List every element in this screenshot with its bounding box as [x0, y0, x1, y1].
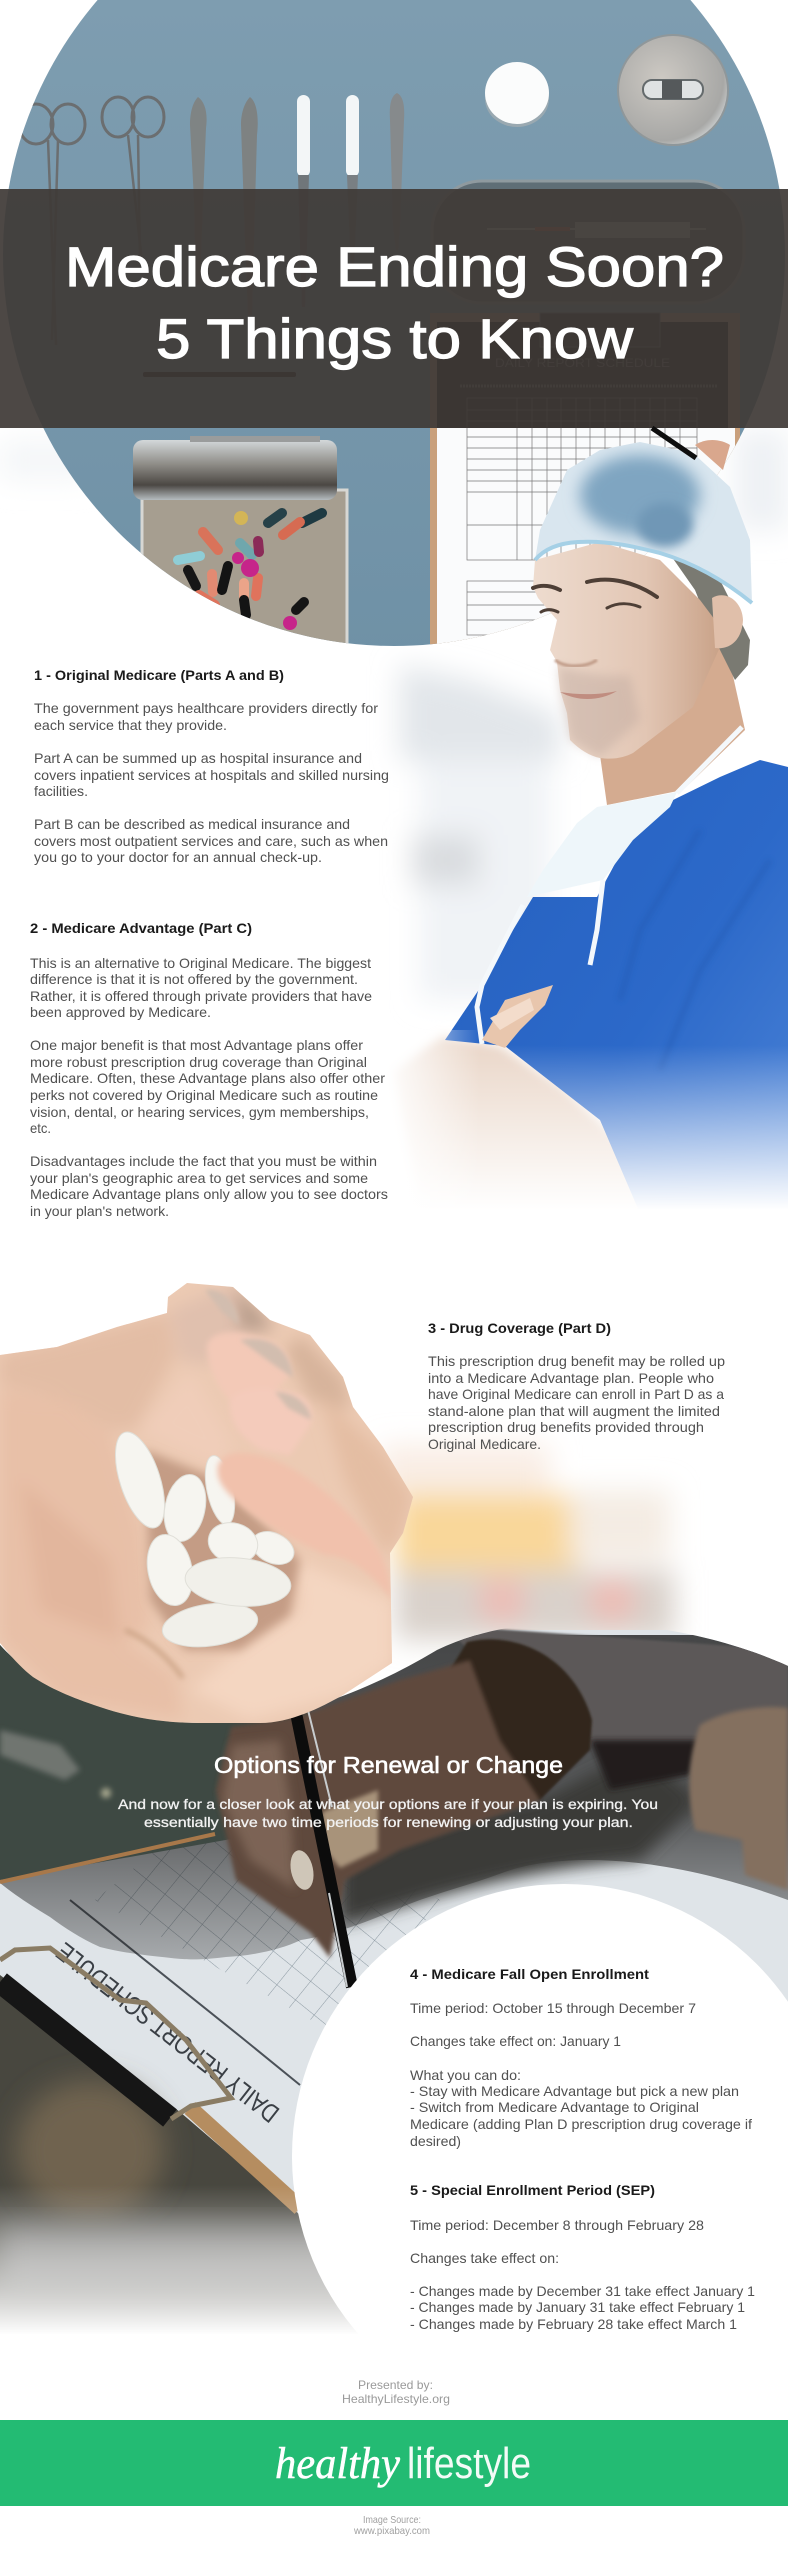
schedule label: DAILY REPORT SCHEDULE	[50, 1937, 285, 2129]
right hand	[690, 1707, 788, 1890]
text block: section 2: more robust prescription drug coverage than Original	[30, 1055, 367, 1070]
fingernail	[290, 1850, 314, 1890]
text block: section 4: 4 - Medicare Fall Open Enrollment	[410, 1966, 649, 1982]
text block: section 3	[428, 1320, 725, 1452]
text block: section 2: 2 - Medicare Advantage (Part C)	[30, 920, 252, 936]
icon: scissors 2	[100, 96, 166, 189]
text block: section 1: Part A can be summed up as hospital insurance and	[34, 751, 362, 766]
text block: section 2: been approved by Medicare.	[30, 1005, 211, 1020]
pen and fingertip	[652, 428, 730, 470]
dark desk	[0, 1630, 310, 1880]
text block: section 2: your plan's geographic area to get services and some	[30, 1171, 368, 1186]
metal clip	[0, 1948, 231, 2119]
text block: section 3: 3 - Drug Coverage (Part D)	[428, 1320, 611, 1336]
text block: section 2: Medicare. Often, these Advantage plans also offer other	[30, 1071, 385, 1086]
photo fade to white	[0, 2100, 788, 2384]
text block: section 1	[34, 667, 389, 865]
text block: section 2: This is an alternative to Original Medicare. The biggest	[30, 956, 371, 971]
hand highlights	[222, 1740, 295, 1890]
heading: options for renewal or change: Options for Renewal or Change	[214, 1752, 563, 1778]
logo: healthy	[275, 2439, 400, 2488]
clipboard with schedule: DAILY REPORT SCHEDULE	[495, 356, 670, 370]
text block: section 2: Disadvantages include the fact that you must be within	[30, 1154, 377, 1169]
desk objects	[0, 1730, 111, 1798]
icon: steel dish	[618, 35, 728, 145]
text block: section 2: etc.	[30, 1121, 51, 1136]
dark wave overlay	[0, 1635, 788, 1959]
logo	[275, 2439, 531, 2488]
cavity shadow	[145, 1450, 300, 1650]
neck	[600, 640, 745, 805]
eyebrows and eyes	[533, 580, 657, 612]
text block: section 5: Changes take effect on:	[410, 2251, 559, 2266]
scrub folds	[620, 830, 770, 1070]
text block: section 3: This prescription drug benefit may be rolled up	[428, 1354, 725, 1369]
icon: tweezers	[390, 93, 404, 189]
logo: lifestyle	[407, 2439, 531, 2488]
text block: section 2: vision, dental, or hearing services, gym memberships,	[30, 1105, 369, 1120]
shadow under sleeve	[590, 1740, 700, 1790]
presented by credit: HealthyLifestyle.org	[342, 2392, 450, 2406]
cuff	[450, 1639, 592, 1800]
text block: section 5: - Changes made by December 31 take effect January 1	[410, 2284, 755, 2299]
straps	[477, 727, 742, 1044]
text block: section 4: What you can do:	[410, 2068, 521, 2083]
blurred hospital backdrop	[0, 430, 788, 1000]
text block: section 1: you go to your doctor for an annual check-up.	[34, 850, 322, 865]
icon: steel tin of capsules	[133, 436, 347, 650]
mouth	[560, 691, 617, 699]
presented by credit: Presented by:	[358, 2378, 433, 2392]
surgical cap	[535, 442, 752, 603]
dark photo: hands over schedule	[0, 1625, 788, 2380]
text block: section 4: Time period: October 15 through December 7	[410, 2001, 696, 2016]
icon: scalpel 2	[241, 97, 258, 189]
text block: section 5: 5 - Special Enrollment Period (SEP)	[410, 2182, 655, 2198]
hand holding pills	[0, 1280, 420, 1730]
text block: section 3: stand-alone plan that will augment the limited	[428, 1404, 720, 1419]
text block: section 2: perks not covered by Original Medicare such as routine	[30, 1088, 378, 1103]
wood edge	[0, 1834, 215, 1882]
text block: options intro: essentially have two time periods for renewing or adjusting your plan.	[144, 1814, 633, 1830]
white circle panel	[292, 1884, 788, 2428]
printed line	[70, 1900, 300, 2085]
text block: section 5: - Changes made by January 31 take effect February 1	[410, 2300, 745, 2315]
icon: scalpel 1	[190, 97, 207, 189]
text block: section 5	[410, 2182, 755, 2332]
text block: options intro	[118, 1796, 658, 1830]
wood edge bottom	[190, 2108, 300, 2208]
title: Medicare Ending Soon?	[65, 235, 724, 298]
text block: section 1: facilities.	[34, 784, 88, 799]
text block: section 4: Changes take effect on: January 1	[410, 2034, 621, 2049]
icon: white handle forceps 1	[297, 95, 310, 189]
text block: section 5: - Changes made by February 28 take effect March 1	[410, 2317, 737, 2332]
text block: section 1: 1 - Original Medicare (Parts A and B)	[34, 667, 284, 683]
text block: section 2: Medicare Advantage plans only allow you to see doctors	[30, 1187, 388, 1202]
doctor figure	[392, 428, 788, 1260]
text block: section 2: difference is that it is not offered by the government.	[30, 972, 358, 987]
hair	[667, 550, 750, 680]
image source credit: www.pixabay.com	[353, 2525, 430, 2537]
text block: section 3: Original Medicare.	[428, 1437, 541, 1452]
icon: scissors 1	[21, 102, 86, 189]
cap shading	[580, 455, 700, 547]
title: 5 Things to Know	[156, 307, 634, 370]
text block: section 1: Part B can be described as medical insurance and	[34, 817, 350, 832]
presented by credit	[342, 2378, 450, 2406]
icon: thermometer	[143, 372, 296, 377]
grid	[95, 1842, 440, 2025]
text block: section 2: in your plan's network.	[30, 1204, 169, 1219]
cap trim	[535, 542, 752, 603]
sleeve	[458, 1628, 788, 1740]
image source credit	[353, 2514, 430, 2537]
clipboard with schedule	[430, 313, 740, 653]
face	[533, 542, 720, 759]
icon: pen	[296, 1710, 352, 1987]
icon: white disc	[485, 62, 549, 127]
board below clip	[0, 1975, 352, 2328]
text block: section 2: One major benefit is that most Advantage plans offer	[30, 1038, 363, 1053]
blurred orange backdrop behind hand	[380, 1445, 675, 1640]
main hand	[216, 1660, 540, 1958]
top circular photo: medical instruments	[0, 0, 788, 660]
nose shadow	[555, 660, 597, 666]
palm crease	[125, 1630, 183, 1678]
text block: section 3: into a Medicare Advantage plan. People who	[428, 1371, 714, 1386]
text block: section 5: Time period: December 8 through February 28	[410, 2218, 704, 2233]
fingernails	[205, 1290, 311, 1420]
text block: section 4	[410, 1966, 752, 2149]
text block: section 4: Medicare (adding Plan D prescription drug coverage if	[410, 2117, 752, 2132]
dark paper shadow	[340, 1750, 700, 1925]
title	[65, 235, 724, 370]
hand fingers	[482, 985, 553, 1048]
text block: section 1: each service that they provide.	[34, 718, 227, 733]
fingertips over pills	[207, 1332, 392, 1600]
text block: section 4: - Stay with Medicare Advantage but pick a new plan	[410, 2084, 739, 2099]
text block: options intro: And now for a closer look at what your options are if your plan is expiring. You	[118, 1796, 658, 1812]
title band	[0, 189, 788, 428]
icon: white handle forceps 2	[346, 95, 359, 189]
text block: section 3: have Original Medicare can enroll in Part D as a	[428, 1387, 724, 1402]
text block: section 2	[30, 920, 388, 1219]
pills	[106, 1426, 299, 1652]
text block: section 4: - Switch from Medicare Advantage to Original	[410, 2100, 699, 2115]
thumb	[322, 1790, 378, 1868]
text block: section 3: prescription drug benefits provided through	[428, 1420, 704, 1435]
icon: syringe tray	[452, 180, 724, 189]
text block: section 2: Rather, it is offered through private providers that have	[30, 989, 372, 1004]
text block: section 4: desired)	[410, 2134, 461, 2149]
soft skin shading	[0, 1283, 412, 1720]
green footer band with logo	[0, 2420, 788, 2506]
text block: section 1: The government pays healthcare providers directly for	[34, 701, 378, 716]
scrubs	[445, 760, 788, 1260]
mask	[527, 792, 677, 897]
doctor fade out	[0, 1030, 788, 1279]
text block: section 1: covers inpatient services at hospitals and skilled nursing	[34, 768, 389, 783]
stubble	[558, 665, 640, 757]
arm	[392, 1036, 710, 1260]
text block: section 1: covers most outpatient services and care, such as when	[34, 834, 388, 849]
ear	[712, 595, 743, 648]
image source credit: Image Source:	[363, 2514, 421, 2526]
